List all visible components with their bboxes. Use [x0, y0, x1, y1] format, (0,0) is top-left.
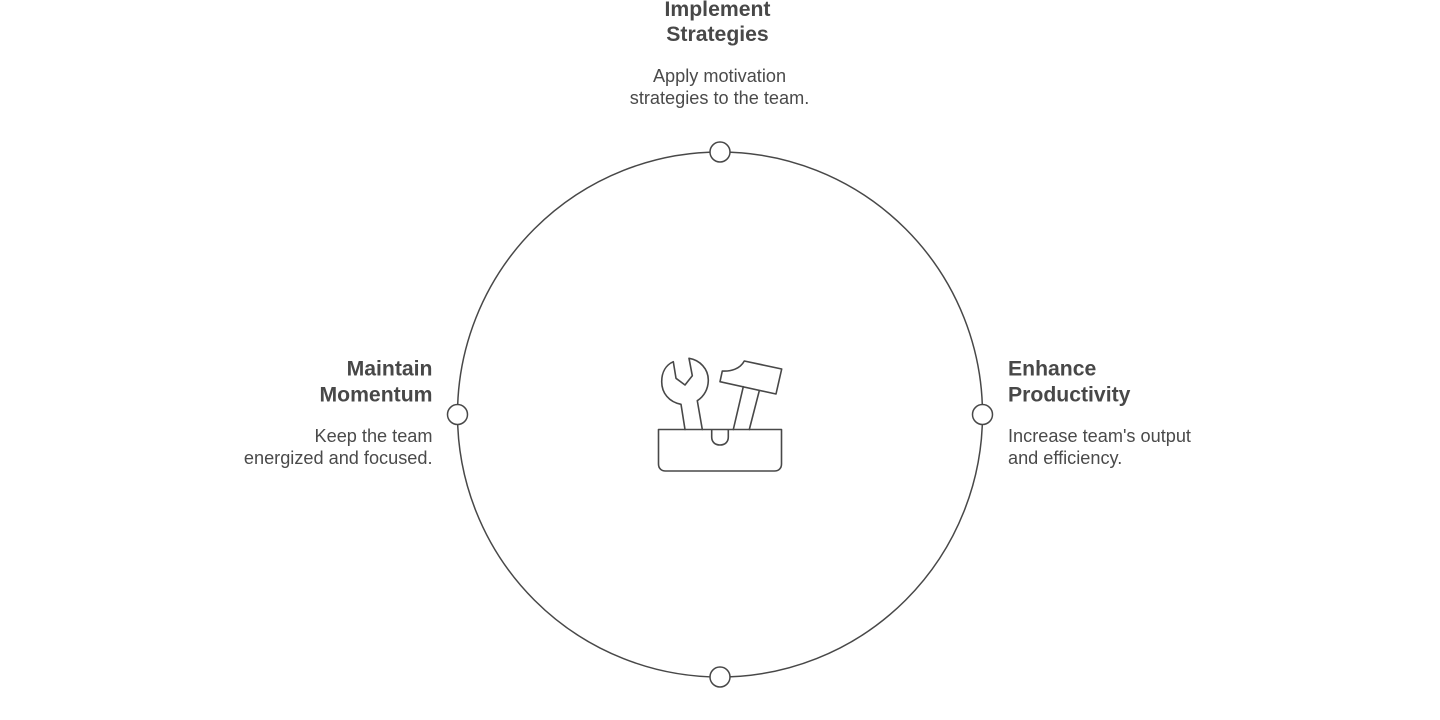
icon part: hammer — [720, 361, 782, 430]
label: Implement Strategies — [630, 0, 809, 108]
description: and efficiency. — [1008, 448, 1122, 468]
heading: Maintain — [347, 358, 432, 380]
heading: Enhance — [1008, 358, 1096, 380]
cycle ring — [458, 152, 982, 677]
node: right — [972, 404, 992, 424]
description: Increase team's output — [1008, 426, 1191, 446]
heading: Productivity — [1008, 384, 1131, 406]
icon: toolbox with wrench and hammer — [658, 358, 782, 471]
description: Apply motivation — [653, 66, 786, 86]
icon part: wrench — [662, 358, 708, 430]
heading: Strategies — [666, 23, 769, 46]
description: energized and focused. — [244, 448, 432, 468]
heading: Momentum — [320, 384, 432, 406]
description: Keep the team — [314, 426, 432, 446]
label: Maintain Momentum — [244, 358, 432, 468]
icon part: toolbox — [658, 430, 782, 471]
node: top — [710, 142, 730, 162]
label: Enhance Productivity — [1008, 358, 1191, 468]
node: left — [448, 404, 468, 424]
description: strategies to the team. — [630, 88, 809, 108]
node: bottom — [710, 667, 730, 687]
